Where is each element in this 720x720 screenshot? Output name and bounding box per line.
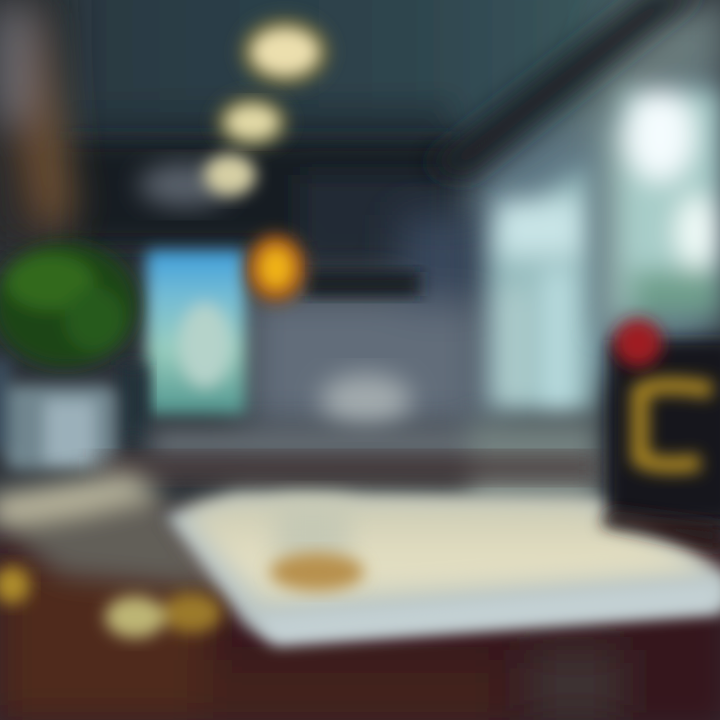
yellow letter mark bbox=[640, 386, 712, 465]
wooden countertop back bbox=[100, 456, 600, 480]
ceiling light 2 bbox=[214, 94, 290, 150]
left cream board bbox=[0, 472, 225, 590]
dark upper wall bbox=[60, 140, 460, 265]
left wall with warm brown trim bbox=[0, 0, 75, 250]
red cap bbox=[614, 319, 662, 367]
left wall below plant bbox=[118, 365, 148, 440]
ceiling bbox=[40, 0, 660, 165]
diagonal ceiling beam bbox=[425, 0, 705, 180]
dark shelf band bbox=[305, 272, 420, 296]
centre tiled wall bbox=[245, 215, 485, 430]
blue window bbox=[146, 250, 246, 415]
white basin bbox=[320, 374, 412, 426]
gold coins front bbox=[105, 593, 222, 638]
plant pot bbox=[0, 360, 117, 470]
right window bbox=[598, 89, 720, 330]
gold coin left bbox=[0, 566, 30, 604]
black box bbox=[600, 340, 720, 550]
plant foliage bbox=[0, 243, 137, 367]
white counter slab bbox=[165, 495, 720, 645]
foreground wood surface bbox=[0, 530, 720, 720]
right wall bbox=[470, 0, 720, 430]
lower wall haze bbox=[150, 420, 600, 505]
amber lamp bbox=[246, 234, 306, 302]
ceiling light 1 bbox=[239, 16, 331, 88]
ceiling light 3 bbox=[139, 154, 256, 207]
centre window bbox=[490, 165, 595, 415]
glass with amber liquid bbox=[270, 500, 364, 591]
